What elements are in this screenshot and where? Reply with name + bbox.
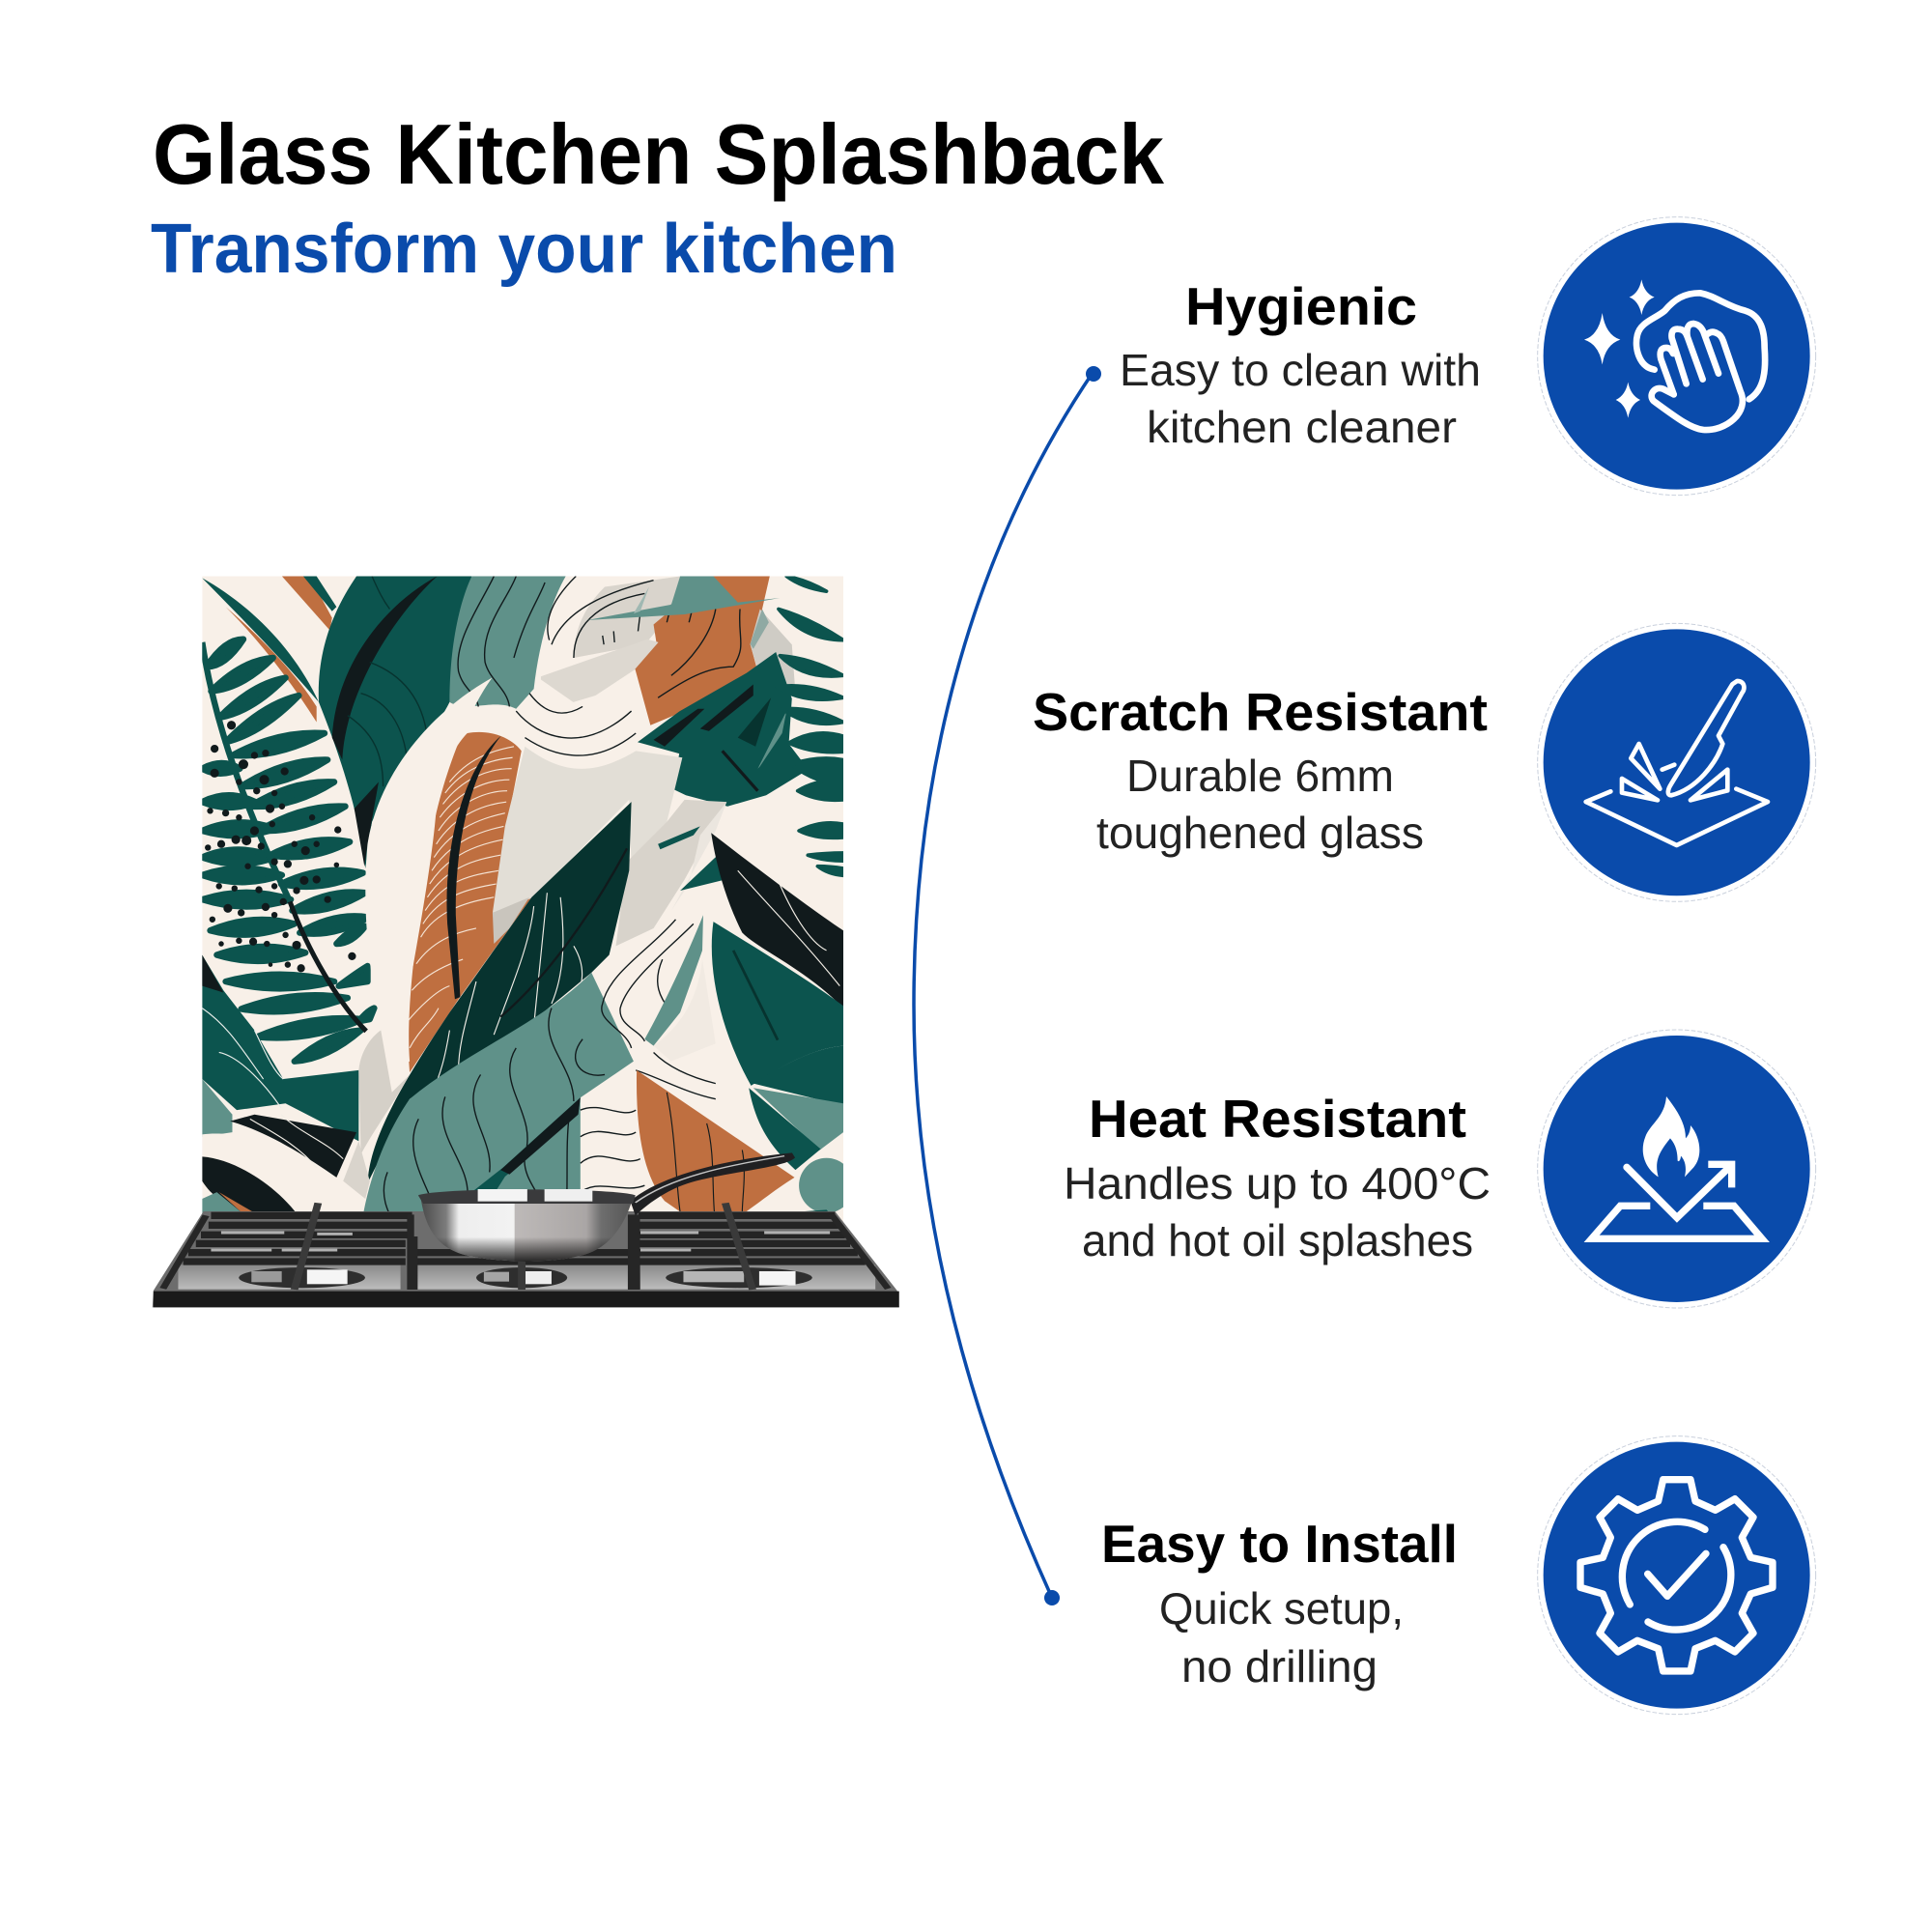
terracotta top right — [635, 577, 770, 725]
terracotta bottom — [637, 1070, 794, 1211]
hob steel panels — [178, 1264, 875, 1290]
feature: scratch resistant text — [1033, 682, 1488, 858]
feature: hygienic text: kitchen cleaner — [1147, 402, 1457, 452]
icon: flame on glass — [1538, 1030, 1816, 1308]
right bottom sage — [799, 1157, 843, 1211]
swirl lines — [516, 576, 742, 756]
bottom left cluster — [202, 955, 358, 1141]
black leaf right — [711, 833, 843, 1009]
right fern — [777, 577, 843, 875]
title: Glass Kitchen Splashback — [153, 106, 1165, 202]
burners — [239, 1267, 812, 1288]
subtitle: Transform your kitchen — [151, 211, 897, 288]
dark stripe — [474, 1097, 581, 1190]
feature: scratch resistant text: toughened glass — [1096, 808, 1424, 858]
feature: heat resistant text: and hot oil splashes — [1082, 1215, 1473, 1265]
dark leaf upper right — [638, 652, 809, 807]
icon: knife scratching glass — [1538, 623, 1816, 901]
pan handle — [631, 1152, 795, 1215]
feature: heat resistant text: Heat Resistant — [1089, 1089, 1466, 1149]
deep green leaf right — [712, 922, 843, 1086]
glass splashback with tropical leaf pattern — [202, 577, 854, 1231]
feature: easy to install text: no drilling — [1181, 1641, 1378, 1691]
pan rim — [418, 1189, 636, 1204]
grey beside terracotta — [750, 609, 795, 684]
fern dots — [206, 722, 355, 971]
feature: easy to install text: Easy to Install — [1101, 1514, 1458, 1574]
terracotta center leaf — [406, 732, 531, 1072]
lined cream region — [580, 919, 716, 1189]
dark green leaf top — [319, 577, 471, 868]
sage wedge — [587, 577, 780, 620]
cooktop with pan — [153, 1152, 899, 1307]
pan body — [420, 1198, 633, 1261]
grey leaf centre — [493, 747, 682, 913]
feature: hygienic text: Hygienic — [1185, 276, 1417, 336]
feature: scratch resistant text: Scratch Resistant — [1033, 682, 1488, 742]
left fern fronds — [202, 639, 374, 1062]
icon: hand wiping — [1538, 217, 1816, 496]
textured grey behind — [616, 800, 726, 946]
sage leaf top — [449, 577, 566, 709]
feature: hygienic text: Easy to clean with — [1120, 345, 1481, 395]
icon: gear with check — [1538, 1436, 1816, 1715]
feature: scratch resistant text: Durable 6mm — [1126, 751, 1394, 801]
pale grey wash upper middle — [574, 577, 680, 658]
feature: easy to install text — [1101, 1514, 1458, 1691]
feature: heat resistant text — [1064, 1089, 1491, 1265]
feature: hygienic text — [1120, 276, 1481, 452]
connector curve with end dots — [914, 366, 1101, 1605]
grates — [184, 1215, 866, 1262]
dark teal diagonal leaf — [367, 802, 632, 1183]
cream leaf — [365, 678, 492, 1070]
feature: easy to install text: Quick setup, — [1159, 1583, 1404, 1634]
sage bottom leaf — [361, 973, 634, 1231]
grey leaf — [541, 639, 659, 702]
feature: heat resistant text: Handles up to 400°C — [1064, 1158, 1491, 1208]
hob body — [153, 1211, 899, 1307]
